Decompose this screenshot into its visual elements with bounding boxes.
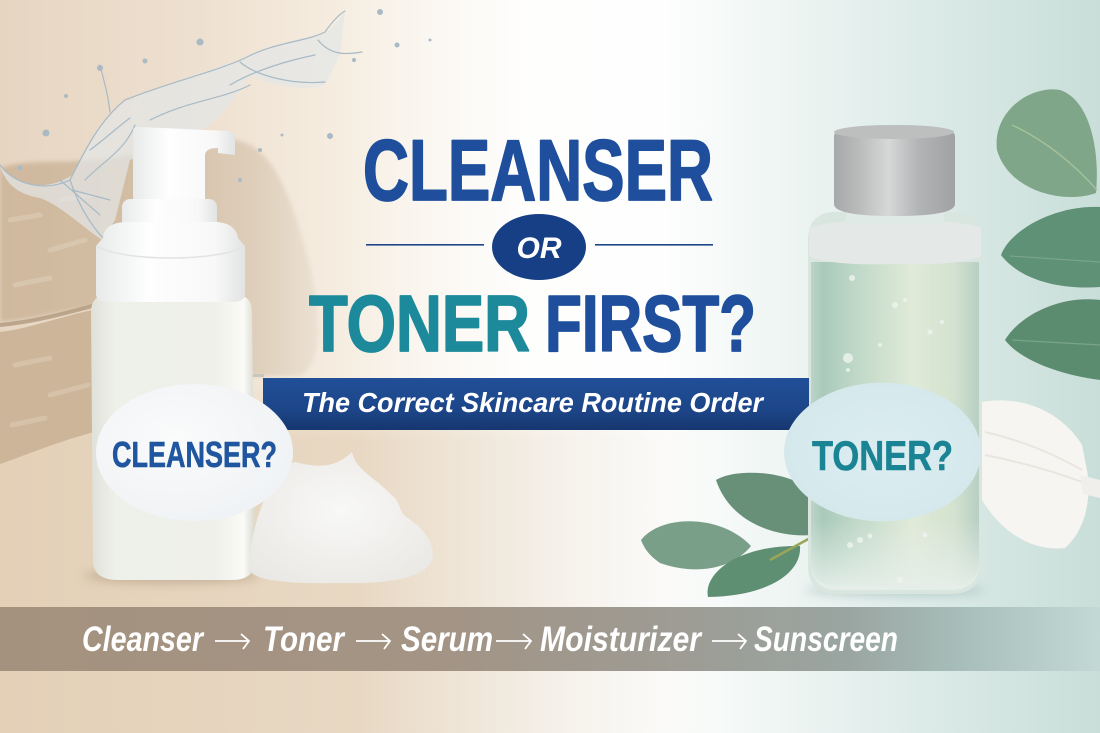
- routine band: [0, 607, 1100, 671]
- white flower: [982, 400, 1100, 548]
- title line: cleanser: CLEANSER: [363, 123, 713, 219]
- or badge with divider lines: [366, 214, 713, 280]
- cleanser label: CLEANSER?: [112, 434, 277, 475]
- or badge with divider lines: OR: [516, 232, 562, 265]
- eucalyptus leaves top right: [997, 89, 1100, 380]
- cleanser label: [96, 384, 293, 521]
- toner bottle: [805, 125, 985, 596]
- title line: toner first: FIRST?: [545, 279, 756, 368]
- routine band: Toner: [263, 620, 346, 659]
- title line: toner first: TONER: [309, 279, 530, 368]
- towels: [0, 140, 318, 464]
- subtitle ribbon: The Correct Skincare Routine Order: [302, 387, 765, 418]
- routine band: Moisturizer: [540, 620, 703, 659]
- toner label: TONER?: [812, 432, 953, 479]
- foam: [250, 452, 433, 583]
- toner label: [784, 382, 981, 522]
- water splash: [0, 9, 432, 240]
- eucalyptus leaves bottom: [641, 473, 812, 597]
- cleanser bottle: [84, 127, 264, 583]
- routine band: Cleanser: [82, 620, 205, 659]
- subtitle ribbon: [263, 378, 809, 430]
- routine band: Sunscreen: [754, 620, 898, 659]
- routine band: Serum: [401, 620, 493, 659]
- title line: toner first: [309, 279, 756, 368]
